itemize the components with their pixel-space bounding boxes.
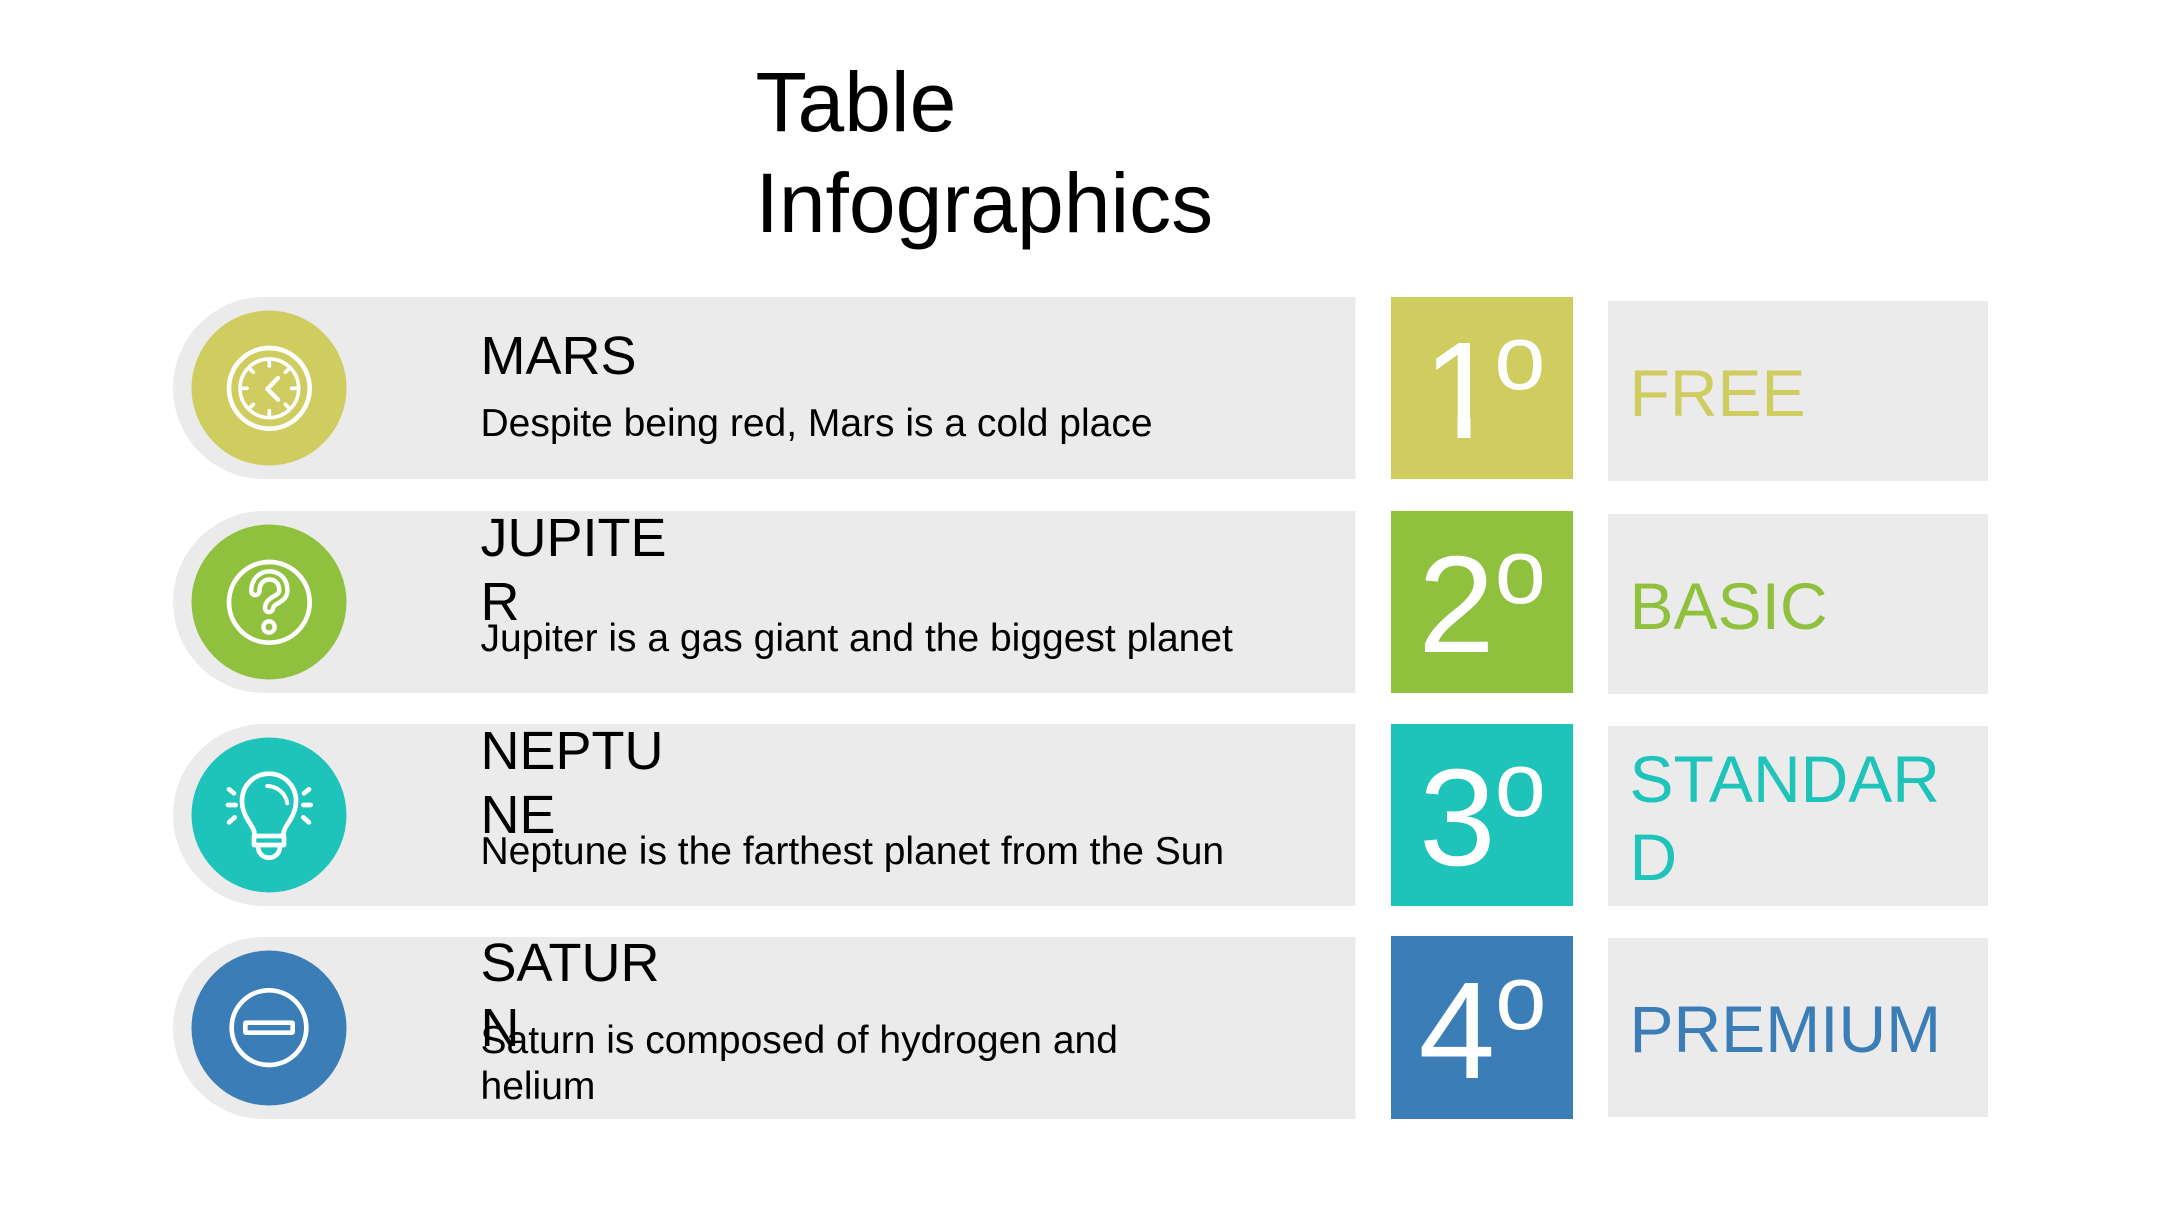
description: Jupiter: Jupiter is a gas giant and the biggest planet [480,617,1233,660]
tier: STANDARD: STANDAR [1630,742,1940,816]
rank: 1st: o [1494,307,1545,409]
heading: SATURN: SATUR [480,933,660,993]
tier: PREMIUM: PREMIUM [1630,992,1941,1066]
pill background: Mars [173,297,1356,479]
panel: Jupiter row [173,508,1988,694]
icon: minus sign [192,950,346,1106]
title [756,55,1213,250]
heading: JUPITER: JUPITE [480,508,667,568]
rank: 4th: o [1495,947,1546,1049]
description: Mars: Despite being red, Mars is a cold place [480,402,1153,445]
title: Infographics [756,156,1213,250]
panel: Saturn row [173,933,1988,1119]
heading: NEPTUNE: NE [480,785,556,845]
icon: question mark [192,524,346,680]
tier: BASIC [1608,514,1988,694]
pill background: Neptune [173,724,1356,906]
tier: STANDARD: D [1630,820,1677,894]
rank: 2nd: o [1495,521,1546,623]
rank: 4th: 4 [1418,954,1495,1108]
tier: FREE [1608,301,1988,481]
tier: FREE: FREE [1630,356,1806,430]
description: Saturn: Saturn is composed of hydrogen and [480,1019,1118,1062]
tier: STANDARD [1608,726,1988,906]
rank: 1st [1391,297,1573,479]
rank: 4th [1391,936,1573,1119]
rank: 2nd [1391,511,1573,693]
rank: 1st: 1 [1423,314,1500,468]
tier: BASIC: BASIC [1630,569,1828,643]
heading: SATURN: N [480,998,520,1058]
rank: 3rd: 3 [1419,741,1496,895]
description: Saturn [480,1019,1118,1108]
rank: 3rd: o [1495,734,1546,836]
description: Saturn: helium [480,1065,595,1108]
description: Neptune: Neptune is the farthest planet from the Sun [480,830,1224,873]
pill background: Saturn [173,937,1356,1119]
heading: NEPTUNE [480,721,664,845]
heading: SATURN [480,933,660,1058]
rank: 3rd [1391,724,1573,906]
icon: light bulb [192,738,346,892]
rank: 2nd: 2 [1418,528,1495,682]
heading: MARS: MARS [480,326,637,386]
pill background: Jupiter [173,511,1356,693]
title: Table [756,55,956,149]
tier: PREMIUM [1608,938,1988,1117]
heading: JUPITER: R [480,572,520,632]
panel: Mars row [173,297,1988,481]
panel: Neptune row [173,721,1988,906]
heading: NEPTUNE: NEPTU [480,721,664,781]
icon: clock [192,310,346,466]
heading: JUPITER [480,508,667,632]
